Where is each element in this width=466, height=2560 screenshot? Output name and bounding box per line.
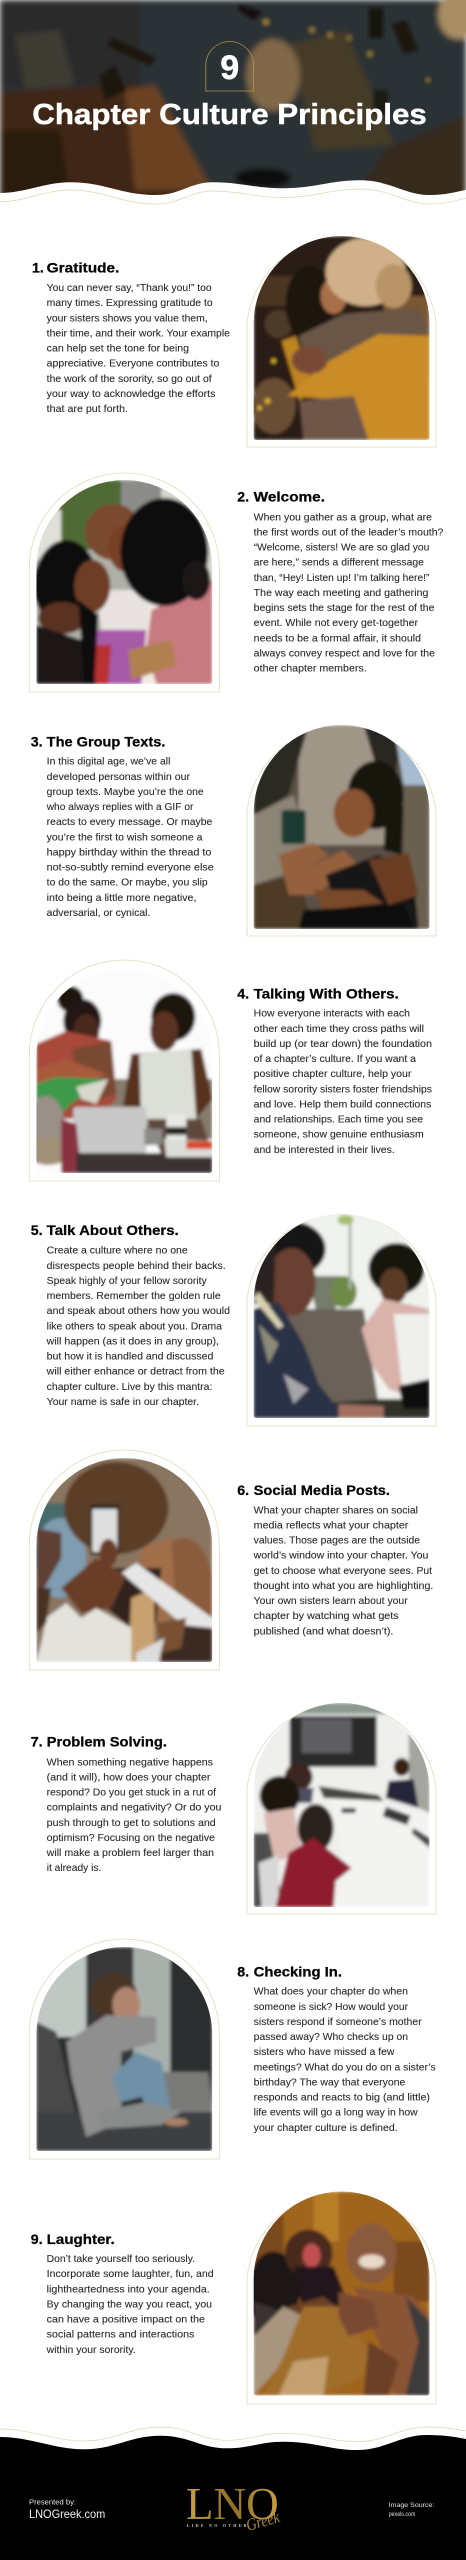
text block: chapter by watching what gets — [254, 1611, 399, 1622]
panel: 3 The Group Texts — [31, 725, 436, 936]
text block: and love. Help them build connections — [254, 1100, 431, 1110]
logo: LNO Greek: LNO — [186, 2478, 279, 2529]
text block: can help set the tone for being — [47, 344, 189, 354]
text block: that are put forth. — [47, 404, 128, 415]
panel: 4 Talking With Others — [26, 960, 432, 1181]
text block: When something negative happens — [47, 1757, 213, 1768]
text block: group texts. Maybe you’re the one — [47, 787, 204, 798]
photo: two women hugging — [252, 236, 430, 440]
text block: The way each meeting and gathering — [254, 588, 429, 599]
text block: not-so-subtly remind everyone else — [47, 863, 214, 874]
text block: Your own sisters learn about your — [254, 1596, 408, 1607]
panel: 6 Social Media Posts — [29, 1450, 433, 1670]
presented by: LNOGreek.com — [29, 2507, 105, 2521]
heading: Gratitude. — [47, 260, 119, 276]
heading: 9. — [31, 2232, 43, 2248]
heading: The Group Texts. — [47, 734, 165, 750]
text block: someone, show genuine enthusiasm — [254, 1130, 424, 1141]
heading: 2. — [237, 490, 249, 506]
heading: Welcome. — [254, 490, 325, 506]
text block: When you gather as a group, what are — [254, 512, 432, 523]
text block: someone is sick? How would your — [254, 2002, 409, 2013]
text block: disrespects people behind their backs. — [47, 1261, 226, 1272]
panel: 5 Talk About Others — [31, 1214, 436, 1426]
heading: 8. — [237, 1964, 249, 1980]
text block: begins sets the stage for the rest of the — [254, 603, 435, 614]
heading: Checking In. — [254, 1964, 342, 1980]
text block: fellow sorority sisters foster friendships — [254, 1084, 432, 1095]
panel: 9 Laughter — [31, 2192, 436, 2404]
text block: You can never say, “Thank you!” too — [47, 283, 212, 294]
text block: lightheartedness into your agenda. — [47, 2284, 210, 2295]
text block: to do the same. Or maybe, you slip — [47, 878, 208, 889]
footer wave — [0, 2435, 466, 2560]
text block: other each time they cross paths will — [254, 1024, 424, 1035]
text block: of a chapter’s culture. If you want a — [254, 1054, 416, 1065]
heading: Problem Solving. — [47, 1735, 167, 1751]
text block: it already is. — [47, 1863, 101, 1874]
text block: social patterns and interactions — [47, 2330, 194, 2341]
text block: will either enhance or detract from the — [46, 1367, 225, 1378]
text block: sisters respond if someone’s mother — [254, 2017, 422, 2028]
text block — [46, 2254, 214, 2356]
text block: other chapter members. — [254, 664, 367, 675]
text block: published (and what doesn’t). — [254, 1626, 393, 1637]
heading: 7. — [31, 1735, 43, 1751]
text block: reacts to every message. Or maybe — [47, 817, 213, 828]
text block: passed away? Who checks up on — [254, 2032, 408, 2043]
number badge: 9 — [206, 41, 254, 91]
text block: (and it will), how does your chapter — [47, 1772, 211, 1783]
text block: get to choose what everyone sees. Put — [254, 1566, 432, 1577]
panel: 1 Gratitude — [32, 236, 436, 447]
text block: appreciative. Everyone contributes to — [47, 359, 220, 370]
text block: meetings? What do you do on a sister’s — [254, 2062, 436, 2073]
text block: within your sorority. — [46, 2345, 136, 2356]
text block: will happen (as it does in any group), — [46, 1336, 219, 1348]
text block: and relationships. Each time you see — [254, 1115, 423, 1126]
presented by: Presented by: — [29, 2498, 76, 2506]
text block: birthday? The way that everyone — [254, 2078, 406, 2088]
text block — [254, 1009, 432, 1156]
heading: Social Media Posts. — [254, 1483, 390, 1499]
text block: How everyone interacts with each — [254, 1009, 410, 1020]
text block: life events will go a long way in how — [254, 2108, 418, 2119]
text block: complaints and negativity? Or do you — [47, 1803, 222, 1814]
footer — [0, 2427, 466, 2560]
logo: LNO Greek: Greek — [244, 2507, 282, 2535]
heading: Talking With Others. — [254, 986, 399, 1002]
photo: woman sitting on couch — [36, 1947, 212, 2151]
text block: into being a little more negative, — [47, 893, 196, 904]
title: Chapter Culture Principles — [32, 99, 427, 131]
text block: event. While not every get-together — [254, 618, 419, 629]
photo: meeting room — [254, 1703, 430, 1907]
text block: chapter culture. Live by this mantra: — [47, 1382, 212, 1393]
photo: two women laughing, gold tinsel — [248, 2192, 430, 2396]
arch frame — [247, 727, 436, 936]
text block: Your name is safe in our chapter. — [47, 1397, 199, 1408]
heading: Talk About Others. — [47, 1223, 179, 1239]
heading: Laughter. — [47, 2232, 115, 2248]
wave: white edge — [0, 180, 466, 215]
text block: values. Those pages are the outside — [254, 1536, 420, 1547]
text block: Speak highly of your fellow sorority — [47, 1276, 208, 1287]
arch frame — [29, 1939, 219, 2159]
text block: your sisters shows you value them, — [47, 313, 208, 324]
text block: can have a positive impact on the — [47, 2314, 205, 2326]
text block: are here,” sends a different message — [254, 558, 424, 569]
presented by — [29, 2498, 105, 2521]
text block: and speak about others how you would — [47, 1306, 230, 1317]
text block: and be interested in their lives. — [254, 1145, 395, 1156]
text block: than, “Hey! Listen up! I’m talking here!” — [254, 573, 430, 584]
heading: 4. — [237, 986, 249, 1002]
arch frame — [29, 473, 219, 692]
text block: but how it is handled and discussed — [47, 1352, 214, 1363]
panel: 8 Checking In — [29, 1939, 436, 2159]
text block: Incorporate some laughter, fun, and — [47, 2269, 214, 2280]
text block: Don’t take yourself too seriously. — [47, 2254, 195, 2265]
text block: your way to acknowledge the efforts — [47, 389, 215, 400]
header banner — [0, 0, 466, 215]
arch frame — [247, 2193, 436, 2404]
heading: 1. — [32, 260, 44, 276]
text block: media reflects what your chapter — [254, 1520, 409, 1531]
panel: 7 Problem Solving — [31, 1703, 436, 1914]
text block: positive chapter culture, help your — [254, 1069, 412, 1080]
arch frame — [247, 1215, 436, 1426]
text block: What does your chapter do when — [254, 1987, 408, 1998]
text block: adversarial, or cynical. — [47, 908, 150, 919]
text block: like others to speak about you. Drama — [47, 1321, 222, 1332]
text block: optimism? Focusing on the negative — [47, 1833, 215, 1844]
photo: two women talking on couch — [254, 1214, 430, 1418]
text block: thought into what you are highlighting. — [254, 1581, 433, 1592]
text block: world’s window into your chapter. You — [253, 1551, 429, 1562]
text block — [254, 1987, 436, 2134]
panel: 2 Welcome — [29, 473, 444, 692]
text block: who always replies with a GIF or — [46, 802, 194, 813]
photo: phone in hand — [34, 1458, 212, 1662]
text block: respond? Do you get stuck in a rut of — [47, 1788, 216, 1799]
text block: always convey respect and love for the — [254, 648, 435, 660]
image source: Image Source: — [389, 2502, 435, 2509]
text block: In this digital age, we’ve all — [47, 757, 170, 768]
text block: many times. Expressing gratitude to — [47, 298, 213, 309]
text block: Create a culture where no one — [47, 1246, 188, 1257]
image source: pexels.com — [389, 2511, 415, 2518]
text block — [253, 1505, 433, 1637]
text block: will make a problem feel larger than — [46, 1848, 214, 1859]
text block: the work of the sorority, so go out of — [47, 374, 212, 385]
heading: 5. — [31, 1223, 43, 1239]
text block: build up (or tear down) the foundation — [254, 1039, 432, 1050]
text block: responds and reacts to big (and little) — [254, 2093, 430, 2104]
text block: members. Remember the golden rule — [47, 1291, 221, 1302]
text block — [254, 512, 444, 675]
number badge: 9: 9 — [220, 49, 239, 87]
photo: woman with phone — [254, 725, 430, 929]
text block: What your chapter shares on social — [254, 1505, 418, 1516]
arch frame — [247, 1704, 436, 1914]
heading: 3. — [31, 734, 43, 750]
text block: needs to be a formal affair, it should — [254, 633, 421, 644]
text block: By changing the way you react, you — [47, 2299, 212, 2310]
text block: sisters who have missed a few — [254, 2047, 395, 2058]
text block: “Welcome, sisters! We are so glad you — [254, 543, 430, 554]
heading: 6. — [237, 1483, 249, 1499]
arch frame — [29, 960, 219, 1181]
text block — [47, 283, 230, 415]
logo: LNO Greek: LIKE NO OTHER — [187, 2523, 248, 2528]
text block: their time, and their work. Your example — [47, 328, 230, 339]
photo: two women on sofa — [36, 984, 212, 1173]
text block: the first words out of the leader’s mouth? — [254, 527, 444, 538]
text block — [46, 1757, 222, 1874]
text block: developed personas within our — [47, 772, 191, 783]
text block — [46, 1246, 230, 1408]
text block: push through to get to solutions and — [47, 1818, 216, 1829]
text block: happy birthday within the thread to — [47, 848, 212, 858]
background photo: party confetti — [0, 0, 466, 205]
text block: you’re the first to wish someone a — [47, 832, 203, 843]
image source — [389, 2502, 435, 2518]
text block: your chapter culture is defined. — [254, 2123, 398, 2134]
text block — [46, 757, 214, 919]
arch frame — [29, 1450, 219, 1670]
arch frame — [247, 238, 436, 447]
photo: three women laughing — [34, 480, 212, 684]
